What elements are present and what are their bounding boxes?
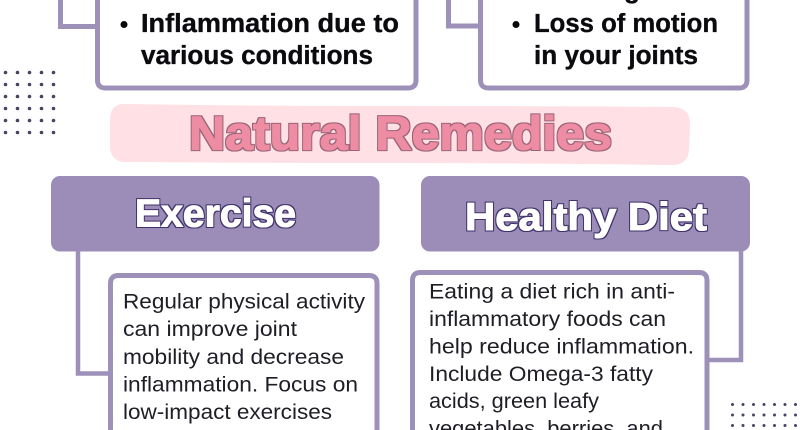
- panel: top right symptoms: in your joints: [534, 42, 698, 70]
- panel: Exercise text: low-impact exercises: [123, 401, 332, 424]
- panel: top right symptoms: [480, 0, 747, 88]
- section banner: pink highlight: [110, 104, 690, 165]
- connector: Exercise: [78, 250, 110, 374]
- header: Exercise: [51, 176, 380, 252]
- dot pattern: left: [4, 71, 55, 134]
- dot pattern: right: [731, 403, 797, 427]
- connector: top right: [448, 0, 481, 26]
- panel: Healthy Diet text: [412, 272, 707, 430]
- connector: Healthy Diet: [707, 250, 741, 360]
- header: Exercise: Exercise: [135, 192, 296, 236]
- panel: Exercise text: can improve joint: [123, 318, 297, 341]
- panel: Healthy Diet text: Eating a diet rich in anti-: [429, 280, 675, 304]
- panel: top left symptoms: [98, 0, 416, 88]
- heading: Natural Remedies: Natural Remedies: [189, 106, 612, 160]
- panel: Exercise text: [110, 276, 377, 430]
- panel: Exercise text: inflammation. Focus on: [123, 374, 358, 396]
- panel: Healthy Diet text: inflammatory foods can: [429, 308, 666, 331]
- panel: top left symptoms: Inflammation due to: [141, 10, 399, 38]
- connector: top left: [60, 0, 98, 26]
- panel: Exercise text: mobility and decrease: [123, 346, 344, 369]
- header: Healthy Diet: Healthy Diet: [465, 196, 707, 239]
- header: Healthy Diet: [421, 176, 750, 252]
- panel: top left symptoms: various conditions: [141, 42, 373, 70]
- panel: Exercise text: Regular physical activity: [123, 290, 366, 314]
- panel: Healthy Diet text: Include Omega-3 fatty: [429, 363, 654, 386]
- panel: Healthy Diet text: help reduce inflammation.: [429, 336, 694, 358]
- panel: top right symptoms: Loss of motion: [534, 10, 718, 38]
- panel: Healthy Diet text: acids, green leafy: [429, 390, 600, 413]
